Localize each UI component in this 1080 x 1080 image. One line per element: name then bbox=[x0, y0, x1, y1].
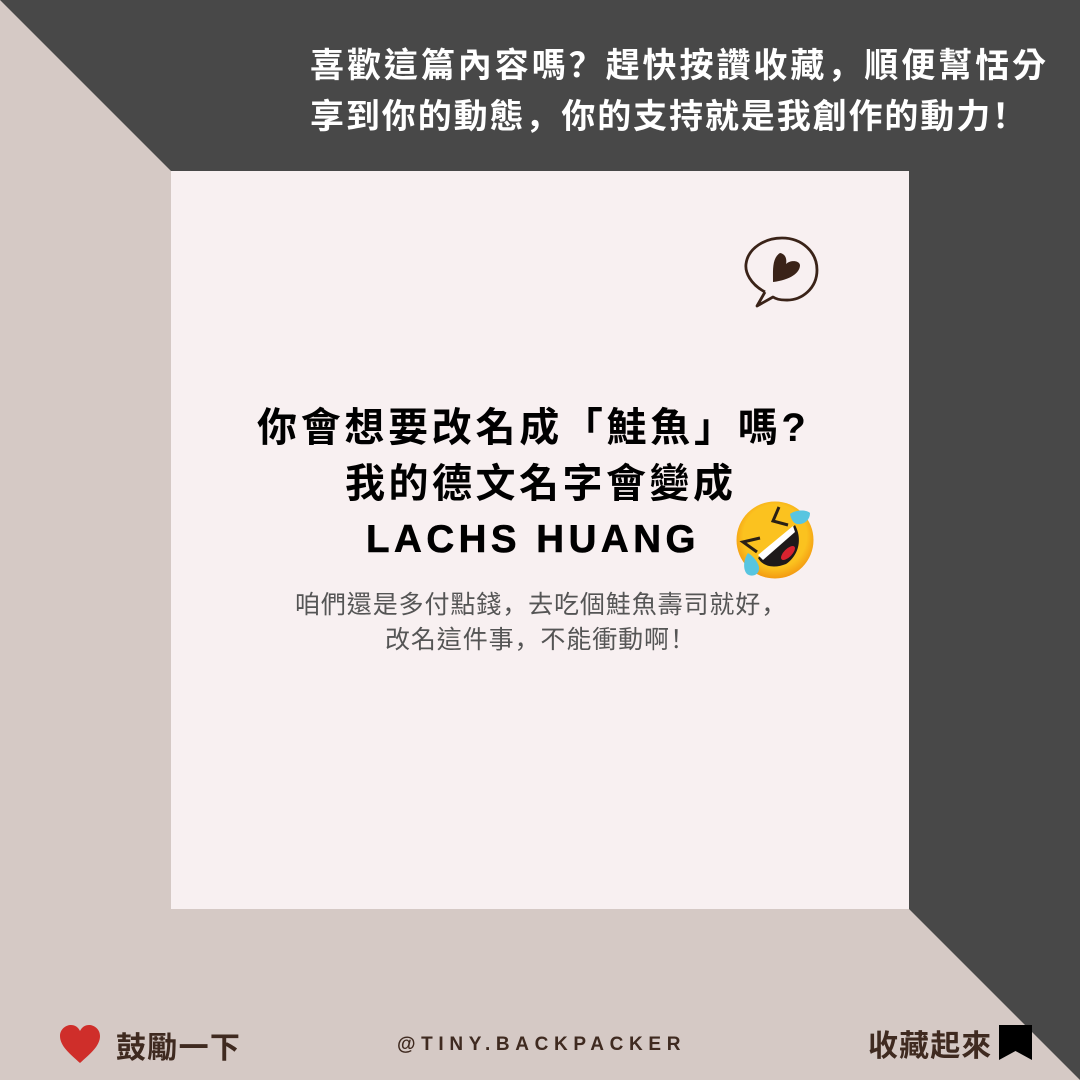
top call to action text: 享到你的動態，你的支持就是我創作的動力！ bbox=[310, 89, 1028, 138]
footer: save bbox=[868, 1025, 1032, 1063]
icon: bookmark bbox=[999, 1025, 1032, 1060]
central panel bbox=[171, 171, 909, 909]
main heading: 你會想要改名成「鮭魚」嗎? bbox=[257, 406, 810, 450]
icon: red heart bbox=[60, 1025, 100, 1063]
main heading: 我的德文名字會變成 bbox=[345, 462, 736, 506]
icon: rolling laughing emoji bbox=[736, 502, 814, 578]
icon: speech bubble with heart bbox=[744, 236, 818, 308]
body text: 改名這件事，不能衝動啊！ bbox=[385, 620, 696, 656]
body text: 咱們還是多付點錢，去吃個鮭魚壽司就好， bbox=[295, 585, 787, 621]
footer: handle: @TINY.BACKPACKER bbox=[397, 1034, 686, 1055]
main heading: LACHS HUANG bbox=[366, 518, 700, 561]
footer: encourage bbox=[60, 1025, 241, 1065]
main heading bbox=[257, 406, 810, 561]
label: 收藏起來 bbox=[868, 1030, 992, 1063]
top call to action text bbox=[310, 38, 1049, 138]
body text bbox=[295, 585, 787, 656]
label: 鼓勵一下 bbox=[116, 1032, 241, 1065]
top call to action text: 喜歡這篇內容嗎？趕快按讚收藏，順便幫恬分 bbox=[310, 38, 1049, 87]
